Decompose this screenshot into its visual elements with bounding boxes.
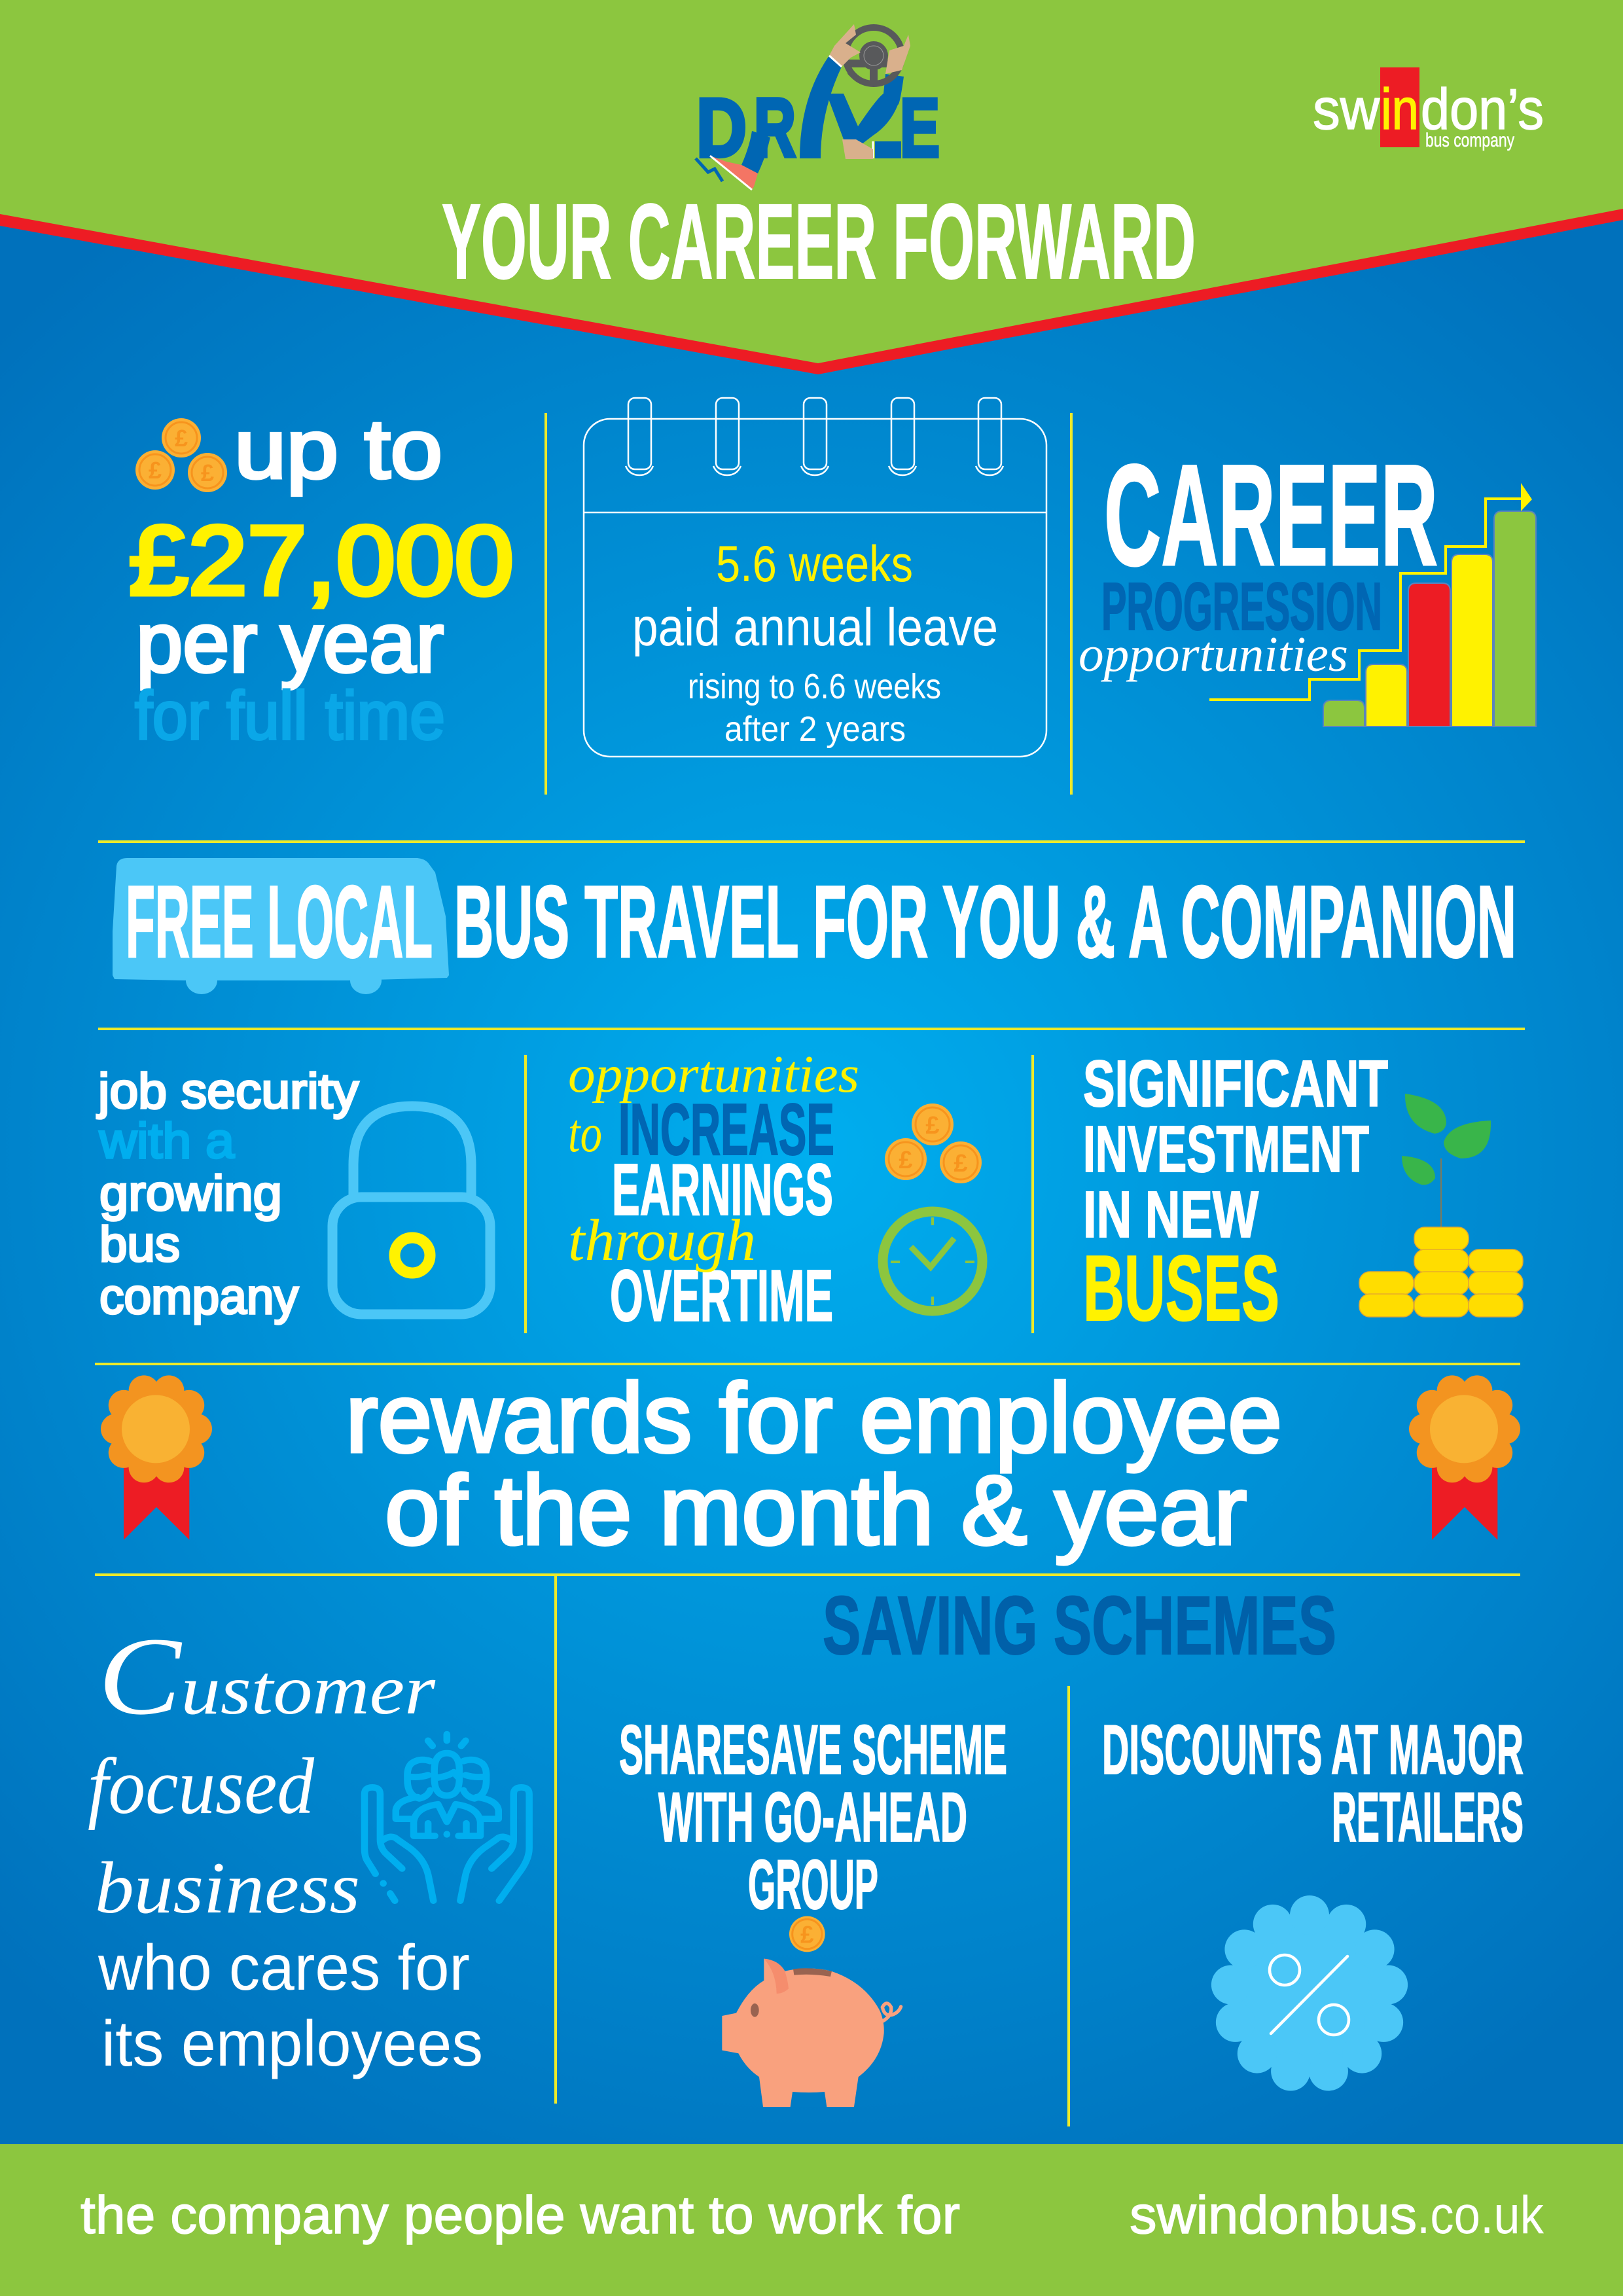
icon: coins: £ [899,1147,913,1174]
panel: customer focused: who cares for [98,1931,470,2003]
icon: coins: £ [175,425,188,452]
panel: investment in new buses: INVESTMENT [1083,1113,1369,1186]
panel: salary [129,403,514,754]
footer: .co.uk [1417,2185,1544,2245]
drive logo: R [754,81,796,174]
icon: clock [883,1211,982,1311]
panel: salary: for full time [135,678,445,754]
panel: overtime earnings: EARNINGS [612,1149,833,1230]
icon: left rosette [109,1382,204,1540]
panel: discounts [1102,1710,1524,2076]
icon: percent badge [1228,1912,1391,2076]
panel: annual leave calendar: rising to 6.6 weeks [688,667,941,706]
panel: overtime earnings: OVERTIME [610,1255,833,1336]
icon: piggy bank [722,1916,901,2107]
panel: annual leave calendar: paid annual leave [632,598,998,657]
pedal [696,158,722,181]
panel: job security: with a [99,1113,235,1169]
arrow: rising steps [1209,483,1532,700]
drive logo: D [696,81,747,174]
panel: sharesave: WITH GO-AHEAD [658,1778,967,1856]
panel: investment in new buses: BUSES [1083,1236,1279,1340]
panel: investment in new buses [1083,1047,1523,1340]
bar chart [1323,511,1536,726]
panel: career progression: opportunities [1079,627,1348,682]
panel: annual leave calendar [584,398,1046,757]
shoe [710,156,758,190]
heading: saving schemes: SAVING SCHEMES [823,1579,1336,1672]
panel: sharesave [619,1710,1007,2107]
icon: padlock [332,1106,490,1314]
icon: coins: £ [149,457,162,484]
footer [0,2144,1623,2296]
icon: hands holding people [365,1734,529,1901]
panel: investment in new buses: SIGNIFICANT [1083,1047,1388,1121]
panel: job security [97,1064,490,1325]
panel: career progression [1079,435,1536,726]
panel: rewards [109,1363,1512,1565]
swindon's bus company logo: sw [1313,77,1380,141]
icon: coins: £ [954,1150,968,1177]
panel: job security: growing [99,1166,282,1221]
swindon's bus company logo [1313,67,1544,151]
icon: coins: £ [925,1112,940,1139]
header banner [0,0,1623,374]
panel: overtime earnings [568,1046,982,1336]
panel: salary: up to [234,403,442,496]
panel: sharesave: SHARESAVE SCHEME [619,1710,1007,1789]
panel: overtime earnings: through [568,1208,756,1273]
panel: overtime earnings: opportunities [568,1046,859,1103]
icon: plant on coin stacks [1359,1094,1523,1317]
panel: overtime earnings: to [568,1103,602,1164]
panel: salary: £27,000 [129,505,514,615]
icon: calendar [584,398,1046,757]
panel: annual leave calendar: 5.6 weeks [716,535,913,592]
panel: customer focused: business [95,1848,360,1929]
panel: rewards: rewards for employee [346,1363,1282,1473]
icon: coins [885,1103,982,1183]
panel: job security: bus [99,1217,180,1272]
panel: rewards: of the month & year [385,1455,1247,1565]
panel: investment in new buses: IN NEW [1083,1178,1258,1251]
drive logo: E [900,81,940,174]
panel: career progression: PROGRESSION [1101,569,1382,644]
panel: sharesave: GROUP [748,1845,878,1924]
swindon's bus company logo: don’s [1421,77,1544,141]
footer: the company people want to work for [80,2185,960,2245]
panel: customer focused: its employees [101,2007,483,2079]
icon: coins: £ [201,459,214,486]
panel: job security: job security [97,1064,359,1119]
panel: customer focused: focused [88,1742,315,1831]
icon: piggy bank: £ [800,1921,814,1948]
drive logo [696,24,940,190]
footer: swindonbus [1130,2185,1417,2245]
panel: job security: company [99,1269,298,1325]
panel: customer focused: Customer [98,1615,436,1738]
panel: salary: per year [136,594,444,690]
panel: customer focused [88,1615,529,2079]
steering wheel [846,27,902,84]
panel: overtime earnings: INCREASE [618,1089,834,1170]
icon: coins [135,418,227,492]
icon: right rosette [1418,1382,1512,1540]
panel: annual leave calendar: after 2 years [724,709,906,749]
swindon's bus company logo: bus company [1425,130,1514,151]
icon: bus [113,858,449,994]
swindon's bus company logo: in [1381,77,1419,141]
panel: free local bus travel: FREE LOCAL [126,865,433,979]
panel: free local bus travel [113,858,1516,994]
